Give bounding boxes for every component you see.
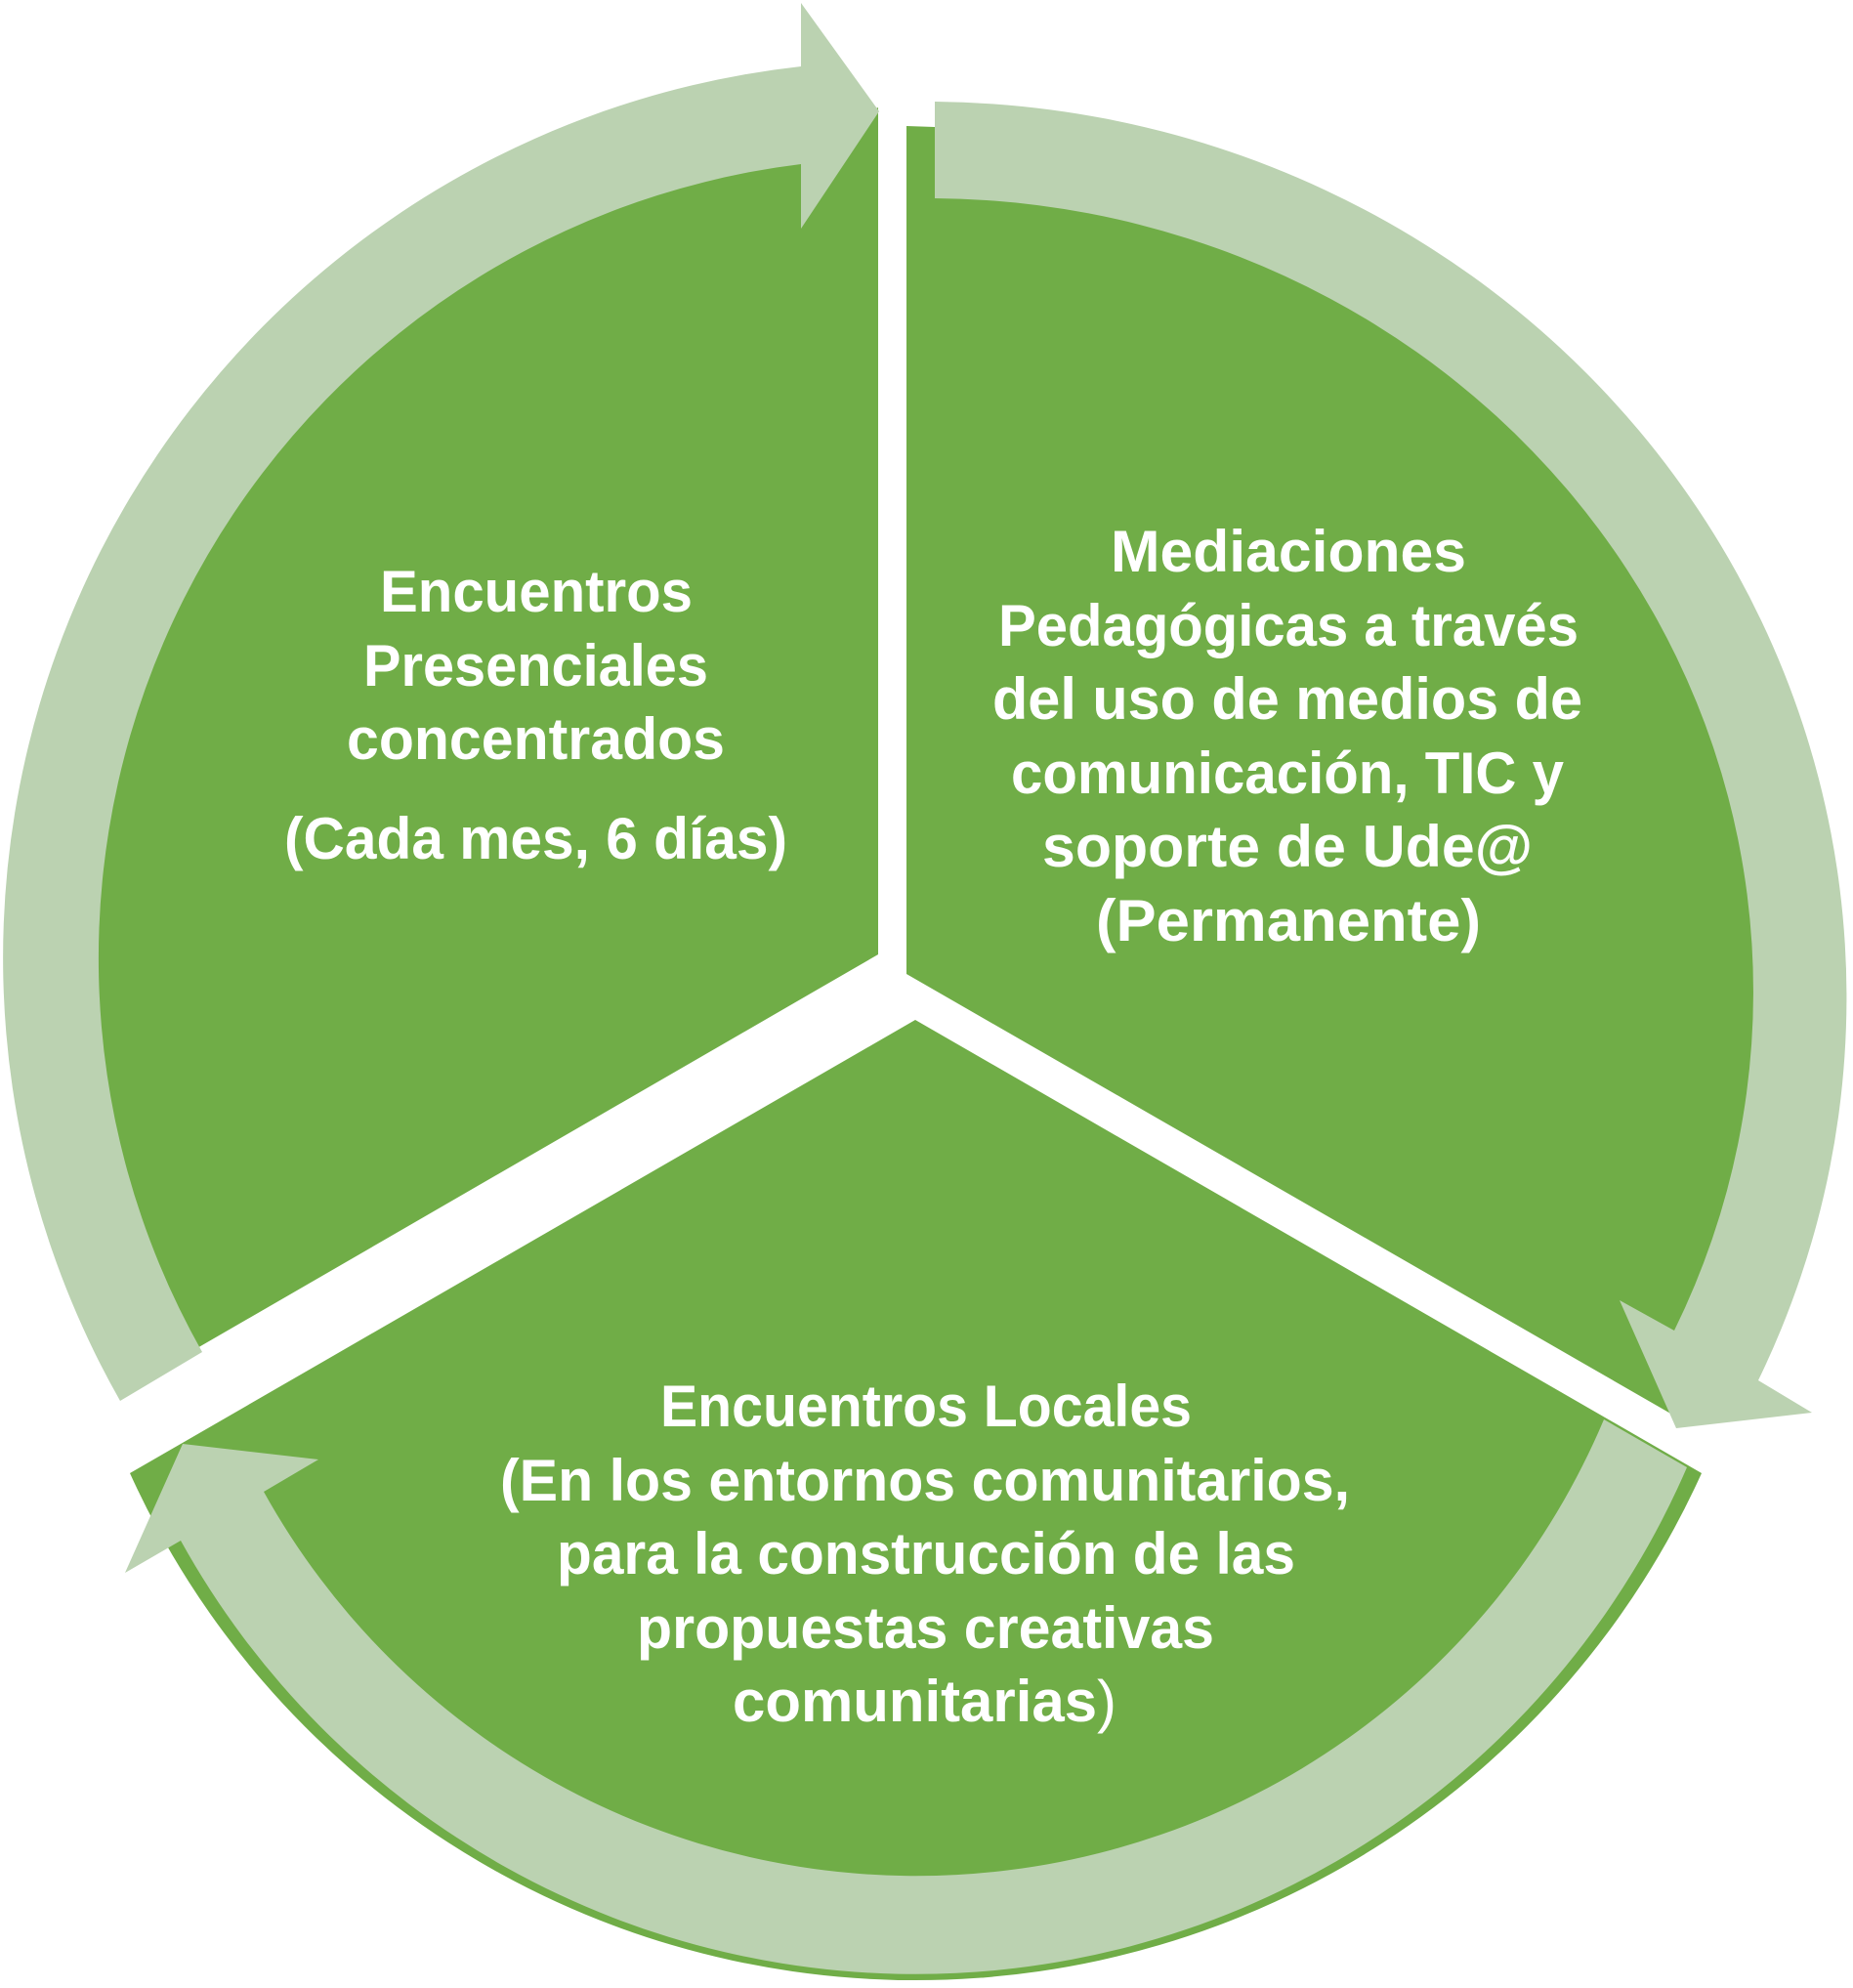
- text block: mediaciones pedagogicas: [992, 519, 1582, 953]
- text block: encuentros locales: propuestas creativas: [637, 1595, 1214, 1661]
- text block: encuentros locales: para la construcción de las: [557, 1521, 1295, 1586]
- text block: mediaciones pedagogicas: Pedagógicas a través: [998, 593, 1579, 658]
- panel: sector encuentros presenciales: [51, 107, 878, 1371]
- text block: encuentros locales: (En los entornos comunitarios,: [500, 1448, 1350, 1513]
- text block: encuentros locales: Encuentros Locales: [660, 1374, 1192, 1439]
- text block: mediaciones pedagogicas: Mediaciones: [1111, 519, 1466, 584]
- text block: mediaciones pedagogicas: comunicación, TIC y: [1011, 740, 1565, 806]
- text block: encuentros presenciales: Presenciales: [363, 633, 708, 698]
- text block: encuentros presenciales: Encuentros: [380, 559, 693, 624]
- panel: sector encuentros locales: [130, 1020, 1702, 1980]
- arrow: bottom arc to lower left: [125, 1419, 1687, 1974]
- text block: mediaciones pedagogicas: (Permanente): [1096, 888, 1481, 953]
- text block: encuentros presenciales: concentrados: [347, 706, 725, 772]
- text block: encuentros locales: comunitarias): [733, 1669, 1116, 1734]
- text block: encuentros presenciales: [284, 559, 787, 871]
- text block: encuentros locales: [500, 1374, 1350, 1734]
- arrow: left arc to top: [3, 3, 879, 1401]
- text block: mediaciones pedagogicas: del uso de medios de: [992, 666, 1582, 732]
- arrow: right arc to lower right: [935, 102, 1846, 1428]
- text block: mediaciones pedagogicas: soporte de Ude@: [1042, 814, 1533, 879]
- text block: encuentros presenciales: (Cada mes, 6 días): [284, 806, 787, 871]
- panel: sector mediaciones pedagogicas: [906, 126, 1800, 1426]
